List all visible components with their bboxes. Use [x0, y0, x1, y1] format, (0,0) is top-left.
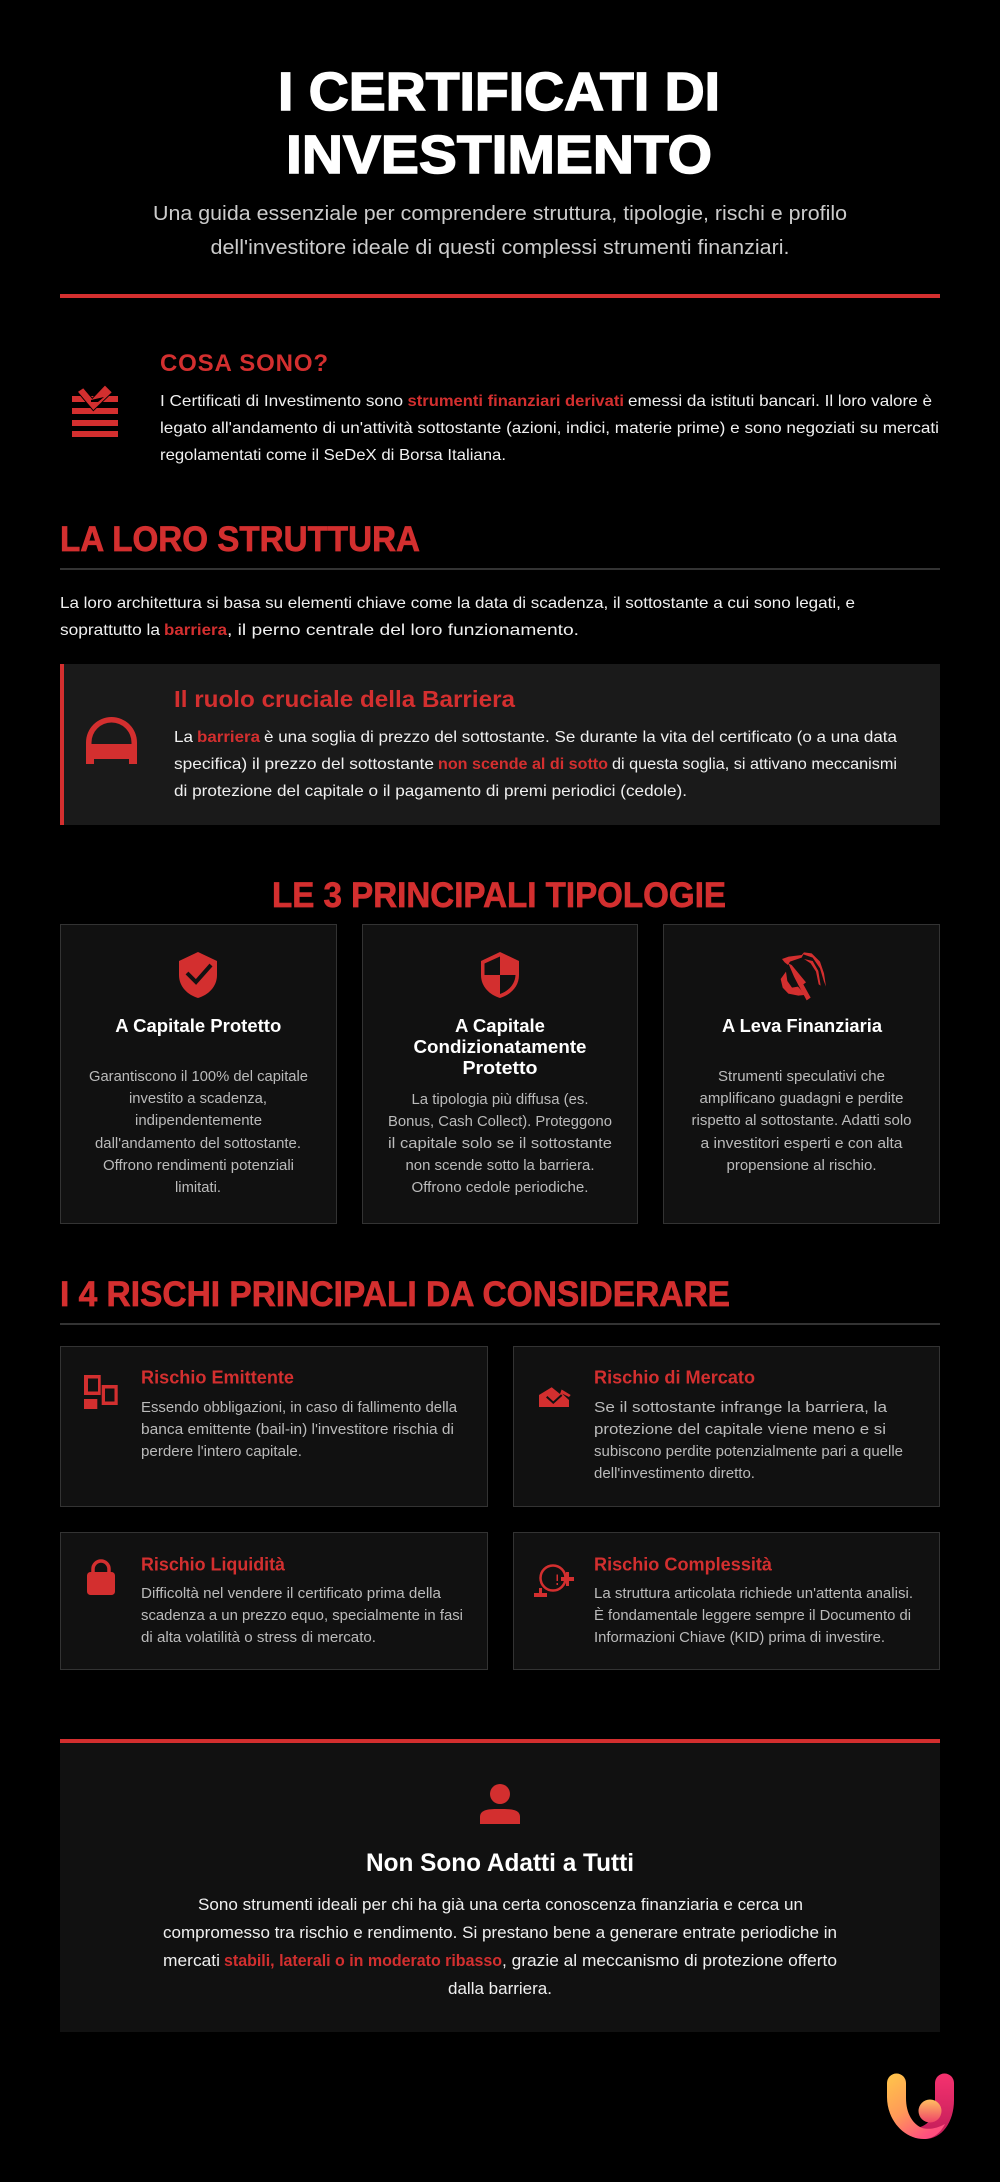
card title: Condizionatamente — [414, 1036, 586, 1057]
card text: La tipologia più diffusa (es. — [412, 1091, 588, 1108]
text block: barriera — [174, 729, 897, 800]
risk text: dell'investimento diretto. — [594, 1465, 755, 1482]
card text: Strumenti speculativi che — [718, 1068, 885, 1085]
text block: barriera: barriera — [197, 729, 260, 746]
risk text: La struttura articolata richiede un'attenta analisi. — [594, 1585, 913, 1602]
text block: definition: I Certificati di Investimento sono — [160, 393, 403, 410]
icon: market chart — [539, 1387, 571, 1407]
text block: barriera: è una soglia di prezzo del sottostante. Se durante la vita del certificato (o a una data — [264, 729, 897, 746]
card text: Offrono rendimenti potenziali — [103, 1157, 294, 1174]
panel text: mercati — [163, 1951, 220, 1970]
panel: non sono adatti a tutti — [60, 1739, 940, 2032]
card title: Protetto — [462, 1057, 538, 1078]
card text — [692, 1068, 912, 1174]
card title: A Capitale Protetto — [115, 1015, 281, 1036]
panel text: Sono strumenti ideali per chi ha già una certa conoscenza finanziaria e cerca un — [198, 1895, 803, 1914]
icon: half shield — [481, 952, 519, 998]
panel: cosa sono — [72, 350, 939, 464]
title: I CERTIFICATI DI — [278, 62, 720, 122]
risk title: Rischio Emittente — [141, 1368, 294, 1388]
icon: person — [480, 1784, 520, 1824]
card text: limitati. — [175, 1179, 221, 1196]
title — [278, 62, 720, 185]
panel: capitale protetto — [60, 924, 336, 1224]
panel: rischio emittente — [60, 1346, 488, 1506]
card text: Garantiscono il 100% del capitale — [89, 1068, 308, 1085]
risk text: di alta volatilità o stress di mercato. — [141, 1629, 376, 1646]
text block: struttura intro: soprattutto la — [60, 622, 160, 639]
risk text: Essendo obbligazioni, in caso di fallimento della — [141, 1399, 458, 1416]
risk text: Informazioni Chiave (KID) prima di investire. — [594, 1629, 885, 1646]
text block: definition: regolamentati come il SeDeX di Borsa Italiana. — [160, 447, 506, 464]
card text: il capitale solo se il sottostante — [388, 1135, 612, 1152]
subtitle — [153, 202, 847, 259]
card title: A Capitale — [455, 1015, 545, 1036]
risk text: subiscono perdite potenzialmente pari a quelle — [594, 1443, 903, 1460]
panel: rischio liquidita — [60, 1532, 488, 1670]
risk text — [594, 1585, 913, 1646]
heading: rischi: I 4 RISCHI PRINCIPALI DA CONSIDERARE — [60, 1274, 730, 1314]
logo — [887, 2074, 954, 2139]
card text: propensione al rischio. — [726, 1157, 876, 1174]
risk text: È fondamentale leggere sempre il Documento di — [594, 1607, 911, 1624]
icon: leverage — [781, 952, 826, 1000]
panel text: , grazie al meccanismo di protezione offerto — [502, 1951, 837, 1970]
panel text: stabili, laterali o in moderato ribasso — [224, 1951, 502, 1970]
text block: barriera: di protezione del capitale o il pagamento di premi periodici (cedole). — [174, 783, 687, 800]
panel text: dalla barriera. — [448, 1979, 552, 1998]
card text: Offrono cedole periodiche. — [412, 1179, 588, 1196]
panel: rischio di mercato — [514, 1346, 940, 1506]
text block: struttura intro: barriera — [164, 622, 227, 639]
risk text — [141, 1399, 458, 1460]
text block: definition: strumenti finanziari derivati — [408, 393, 624, 410]
card text: investito a scadenza, — [129, 1090, 267, 1107]
text block: definition — [160, 393, 939, 464]
card text — [388, 1091, 612, 1196]
risk text: Difficoltà nel vendere il certificato prima della — [141, 1585, 442, 1602]
text block: barriera: non scende al di sotto — [438, 756, 608, 773]
card title — [414, 1015, 586, 1078]
icon: barrier arch — [86, 717, 137, 764]
card text: rispetto al sottostante. Adatti solo — [692, 1112, 912, 1129]
panel: leva finanziaria — [664, 924, 940, 1224]
card text: a investitori esperti e con alta — [700, 1135, 903, 1152]
risk text: Se il sottostante infrange la barriera, la — [594, 1399, 888, 1416]
card text: dall'andamento del sottostante. — [95, 1135, 301, 1152]
text block: definition: legato all'andamento di un'attività sottostante (azioni, indici, materie prime) e sono negoziati su mercati — [160, 420, 939, 437]
risk title: Rischio Complessità — [594, 1554, 773, 1574]
icon: complexity — [534, 1566, 574, 1597]
text block: barriera: La — [174, 729, 193, 746]
heading: la loro struttura: LA LORO STRUTTURA — [60, 519, 420, 559]
title: INVESTIMENTO — [286, 125, 712, 185]
icon: shield check — [179, 952, 217, 998]
card text — [89, 1068, 308, 1196]
panel: barriera — [60, 664, 940, 825]
risk text — [594, 1399, 903, 1482]
panel text: compromesso tra rischio e rendimento. Si prestano bene a generare entrate periodiche in — [163, 1923, 837, 1942]
panel: rischio complessita — [514, 1532, 940, 1670]
risk title: Rischio Liquidità — [141, 1554, 286, 1574]
heading: tipologie: LE 3 PRINCIPALI TIPOLOGIE — [272, 875, 726, 915]
text block: barriera: di questa soglia, si attivano meccanismi — [612, 756, 897, 773]
card title: A Leva Finanziaria — [722, 1015, 883, 1036]
card text: non scende sotto la barriera. — [406, 1157, 594, 1174]
text block: barriera: specifica) il prezzo del sottostante — [174, 756, 434, 773]
risk text: protezione del capitale viene meno e si — [594, 1421, 886, 1438]
panel heading: Non Sono Adatti a Tutti — [366, 1849, 634, 1877]
text block: struttura intro: La loro architettura si basa su elementi chiave come la data di scadenza, il sottostante a cui sono legati, e — [60, 595, 855, 612]
heading: ruolo cruciale: Il ruolo cruciale della Barriera — [174, 686, 516, 712]
text block: struttura intro — [60, 595, 855, 639]
icon: lock — [87, 1561, 115, 1595]
icon: linked squares — [84, 1375, 118, 1409]
text block: definition: emessi da istituti bancari. Il loro valore è — [628, 393, 932, 410]
subtitle: dell'investitore ideale di questi complessi strumenti finanziari. — [210, 236, 790, 259]
risk title: Rischio di Mercato — [594, 1368, 755, 1388]
card text: indipendentemente — [135, 1112, 262, 1129]
risk text: scadenza a un prezzo equo, specialmente in fasi — [141, 1607, 463, 1624]
panel text — [163, 1895, 837, 1998]
card text: amplificano guadagni e perdite — [700, 1090, 904, 1107]
subtitle: Una guida essenziale per comprendere struttura, tipologie, rischi e profilo — [153, 202, 847, 225]
card text: Bonus, Cash Collect). Proteggono — [388, 1113, 612, 1130]
panel: capitale condizionatamente protetto — [362, 924, 638, 1224]
risk text: perdere l'intero capitale. — [141, 1443, 302, 1460]
text block: struttura intro: , il perno centrale del loro funzionamento. — [227, 622, 579, 639]
heading: cosa sono: COSA SONO? — [160, 350, 328, 377]
icon: certificate check — [72, 385, 118, 437]
risk text: banca emittente (bail-in) l'investitore rischia di — [141, 1421, 454, 1438]
risk text — [141, 1585, 463, 1646]
